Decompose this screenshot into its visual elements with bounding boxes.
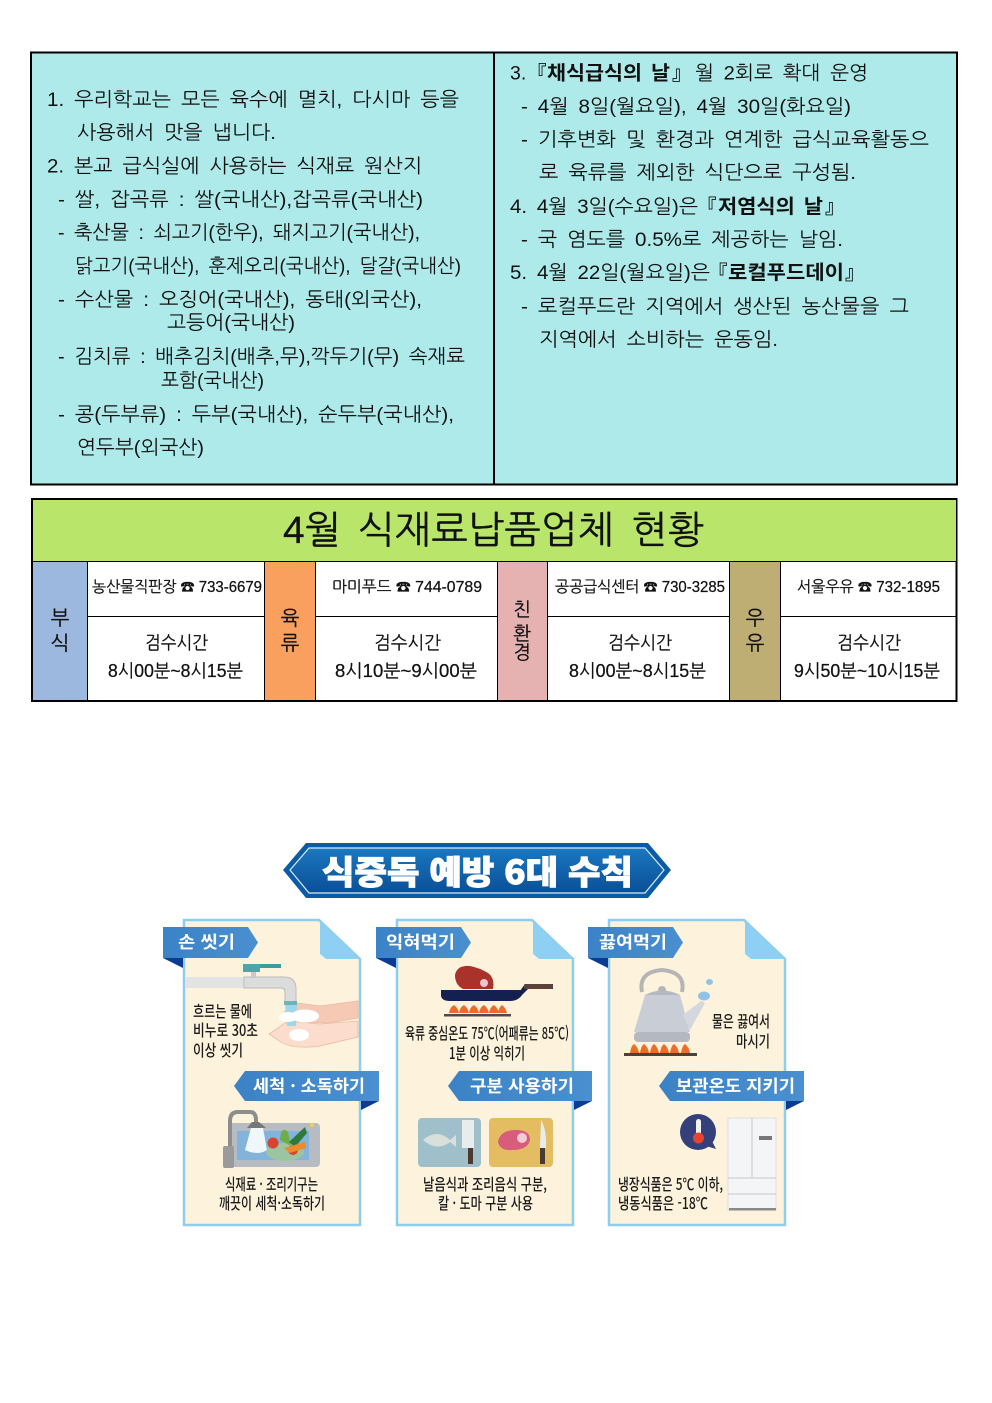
icon: meat in frying pan over flame — [441, 966, 553, 1016]
text: sanitizing instruction — [219, 1171, 325, 1214]
category: eco-friendly: 친 — [513, 600, 531, 621]
supplier: meat — [332, 579, 482, 681]
text block: broth and ingredient origins: 연두부(외국산) — [77, 437, 204, 459]
card: boiling water and storage temperature — [588, 920, 804, 1225]
text block: special meal days: 월 2회로 확대 운영 — [695, 62, 868, 84]
tab: keep storage temperature: 보관온도 지키기 — [676, 1072, 795, 1097]
category: eco-friendly: 경 — [513, 643, 531, 664]
text block: special meal days: 지역에서 소비하는 운동임. — [539, 329, 778, 351]
text block: special meal days: 』 — [845, 256, 865, 285]
text block: special meal days: 저염식의 날 — [718, 190, 823, 219]
tab: cook thoroughly: 익혀먹기 — [386, 928, 455, 953]
text: boil water instruction: 마시기 — [736, 1028, 770, 1052]
text block: special meal days: 3. — [510, 62, 526, 84]
supplier: produce: 검수시간 — [145, 633, 208, 653]
supplier: meat: 마미푸드 ☎ 744-0789 — [332, 579, 482, 596]
text block: special meal days: 』 — [825, 190, 845, 219]
category: milk: 우 — [746, 608, 765, 630]
text block: special meal days: 로 육류를 제외한 식단으로 구성됨. — [539, 162, 856, 184]
category: milk: 유 — [746, 633, 765, 655]
supplier: milk: 서울우유 ☎ 732-1895 — [797, 579, 940, 596]
text block: special meal days: 로컬푸드데이 — [728, 256, 844, 285]
text block: special meal days: 4. 4월 3일(수요일)은 — [510, 196, 698, 218]
supplier: eco-friendly: 검수시간 — [608, 633, 672, 653]
tab: boil before drinking: 끓여먹기 — [599, 928, 667, 953]
text block: special meal days: 채식급식의 날 — [547, 56, 670, 86]
tab: hand washing — [163, 927, 258, 968]
text block: special meal days: - 4월 8일(월요일), 4월 30일(화요일) — [521, 96, 851, 118]
text block: broth and ingredient origins: 포함(국내산) — [161, 370, 264, 392]
tab: separate use: 구분 사용하기 — [470, 1072, 574, 1097]
text: separate utensils instruction: 칼 · 도마 구분 사용 — [438, 1190, 533, 1214]
text block: broth and ingredient origins: 사용해서 맛을 냅니다. — [77, 122, 276, 144]
text block: broth and ingredient origins: - 김치류 : 배추김치(배추,무),깍두기(무) 속재료 — [58, 346, 465, 368]
text block: broth and ingredient origins — [47, 89, 465, 459]
supplier: milk — [794, 579, 940, 681]
category: meat: 육 — [281, 608, 300, 630]
category: milk — [746, 608, 765, 655]
card: cooking thoroughly and separating utensils — [376, 920, 592, 1225]
text block: special meal days — [510, 56, 929, 351]
text: wash hands instruction: 이상 씻기 — [193, 1037, 243, 1061]
icon: kettle on burner — [624, 970, 713, 1056]
text block: broth and ingredient origins: - 축산물 : 쇠고기(한우), 돼지고기(국내산), — [58, 222, 420, 244]
text: storage temperature instruction: 냉동식품은 -18℃ — [618, 1190, 708, 1214]
icon: cutting board with fish and cleaver — [418, 1118, 481, 1167]
supplier: produce: 농산물직판장 ☎ 733-6679 — [92, 579, 262, 596]
text: separate utensils instruction — [423, 1171, 547, 1214]
supplier: eco-friendly — [555, 578, 725, 681]
text block: broth and ingredient origins: - 쌀, 잡곡류 : 쌀(국내산),잡곡류(국내산) — [58, 189, 423, 211]
text: wash hands instruction — [193, 998, 258, 1061]
panel: school meal information — [31, 52, 957, 485]
text: wash hands instruction: 비누로 30초 — [193, 1017, 258, 1041]
text block: special meal days: - 로컬푸드란 지역에서 생산된 농산물을 그 — [521, 296, 909, 318]
text: separate utensils instruction: 날음식과 조리음식 구분, — [423, 1171, 547, 1195]
text: storage temperature instruction — [618, 1171, 723, 1214]
text block: broth and ingredient origins: 고등어(국내산) — [167, 312, 295, 334]
card: hand washing and sanitizing — [163, 920, 379, 1225]
banner: six food poisoning prevention rules — [283, 843, 671, 898]
banner: six food poisoning prevention rules: 식중독 예방 6대 수칙 — [322, 846, 633, 894]
panel: April ingredient suppliers table — [32, 499, 957, 701]
text: cooking temperature: 육류 중심온도 75℃(어패류는 85℃) — [405, 1020, 569, 1044]
tab: keep storage temperature — [659, 1071, 804, 1110]
category: side dishes — [51, 608, 70, 655]
text: wash hands instruction: 흐르는 물에 — [193, 998, 252, 1022]
tab: cook thoroughly — [376, 927, 471, 968]
text: boil water instruction: 물은 끓여서 — [712, 1008, 770, 1032]
supplier: milk: 9시50분~10시15분 — [794, 661, 940, 681]
category: side dishes: 부 — [51, 608, 70, 630]
text block: broth and ingredient origins: - 수산물 : 오징어(국내산), 동태(외국산), — [58, 289, 422, 311]
supplier: meat: 8시10분~9시00분 — [335, 661, 477, 681]
icon: cutting board with meat and knife — [489, 1118, 553, 1167]
tab: sanitizing: 세척 · 소독하기 — [253, 1072, 365, 1097]
tab: boil before drinking — [588, 927, 683, 968]
text block: special meal days: 5. 4월 22일(월요일)은 — [510, 262, 710, 284]
text block: broth and ingredient origins: 1. 우리학교는 모든 육수에 멸치, 다시마 등을 — [47, 89, 459, 111]
text block: broth and ingredient origins: - 콩(두부류) : 두부(국내산), 순두부(국내산), — [58, 404, 454, 426]
tab: sanitizing — [234, 1071, 379, 1110]
text: sanitizing instruction: 깨끗이 세척·소독하기 — [219, 1190, 325, 1214]
text block: broth and ingredient origins: 닭고기(국내산), 훈제오리(국내산), 달걀(국내산) — [75, 256, 461, 278]
text: cooking temperature: 1분 이상 익히기 — [449, 1040, 525, 1064]
category: eco-friendly: 환 — [513, 624, 531, 645]
supplier: milk: 검수시간 — [837, 633, 901, 653]
text block: special meal days: 『 — [527, 56, 547, 86]
category: eco-friendly — [513, 600, 531, 664]
category: meat: 류 — [281, 633, 300, 655]
text: boil water instruction — [712, 1008, 770, 1052]
icon: refrigerator — [728, 1118, 776, 1210]
category: meat — [281, 608, 300, 655]
icon: faucet and hands — [186, 964, 358, 1047]
text block: special meal days: 『 — [697, 190, 717, 219]
category: side dishes: 식 — [51, 633, 69, 655]
text block: special meal days: 『 — [708, 256, 728, 285]
supplier: produce — [92, 579, 262, 681]
supplier: eco-friendly: 8시00분~8시15분 — [569, 661, 706, 681]
table title: 4월 식재료납품업체 현황 — [283, 510, 704, 552]
tab: separate use — [448, 1071, 592, 1110]
text: storage temperature instruction: 냉장식품은 5℃ 이하, — [618, 1171, 723, 1195]
text: cooking temperature — [405, 1020, 569, 1064]
text block: special meal days: - 국 염도를 0.5%로 제공하는 날임. — [521, 229, 843, 251]
supplier: produce: 8시00분~8시15분 — [108, 661, 243, 681]
text block: broth and ingredient origins: 2. 본교 급식실에 사용하는 식재료 원산지 — [47, 156, 422, 178]
text: sanitizing instruction: 식재료 · 조리기구는 — [225, 1171, 318, 1195]
icon: sink with vegetables — [223, 1112, 320, 1168]
supplier: meat: 검수시간 — [374, 633, 441, 653]
icon: thermometer speech bubble — [680, 1114, 716, 1150]
supplier: eco-friendly: 공공급식센터 ☎ 730-3285 — [555, 578, 725, 596]
text block: special meal days: - 기후변화 및 환경과 연계한 급식교육활동으 — [521, 129, 929, 151]
tab: hand washing: 손 씻기 — [178, 928, 235, 953]
text block: special meal days: 』 — [672, 56, 692, 86]
